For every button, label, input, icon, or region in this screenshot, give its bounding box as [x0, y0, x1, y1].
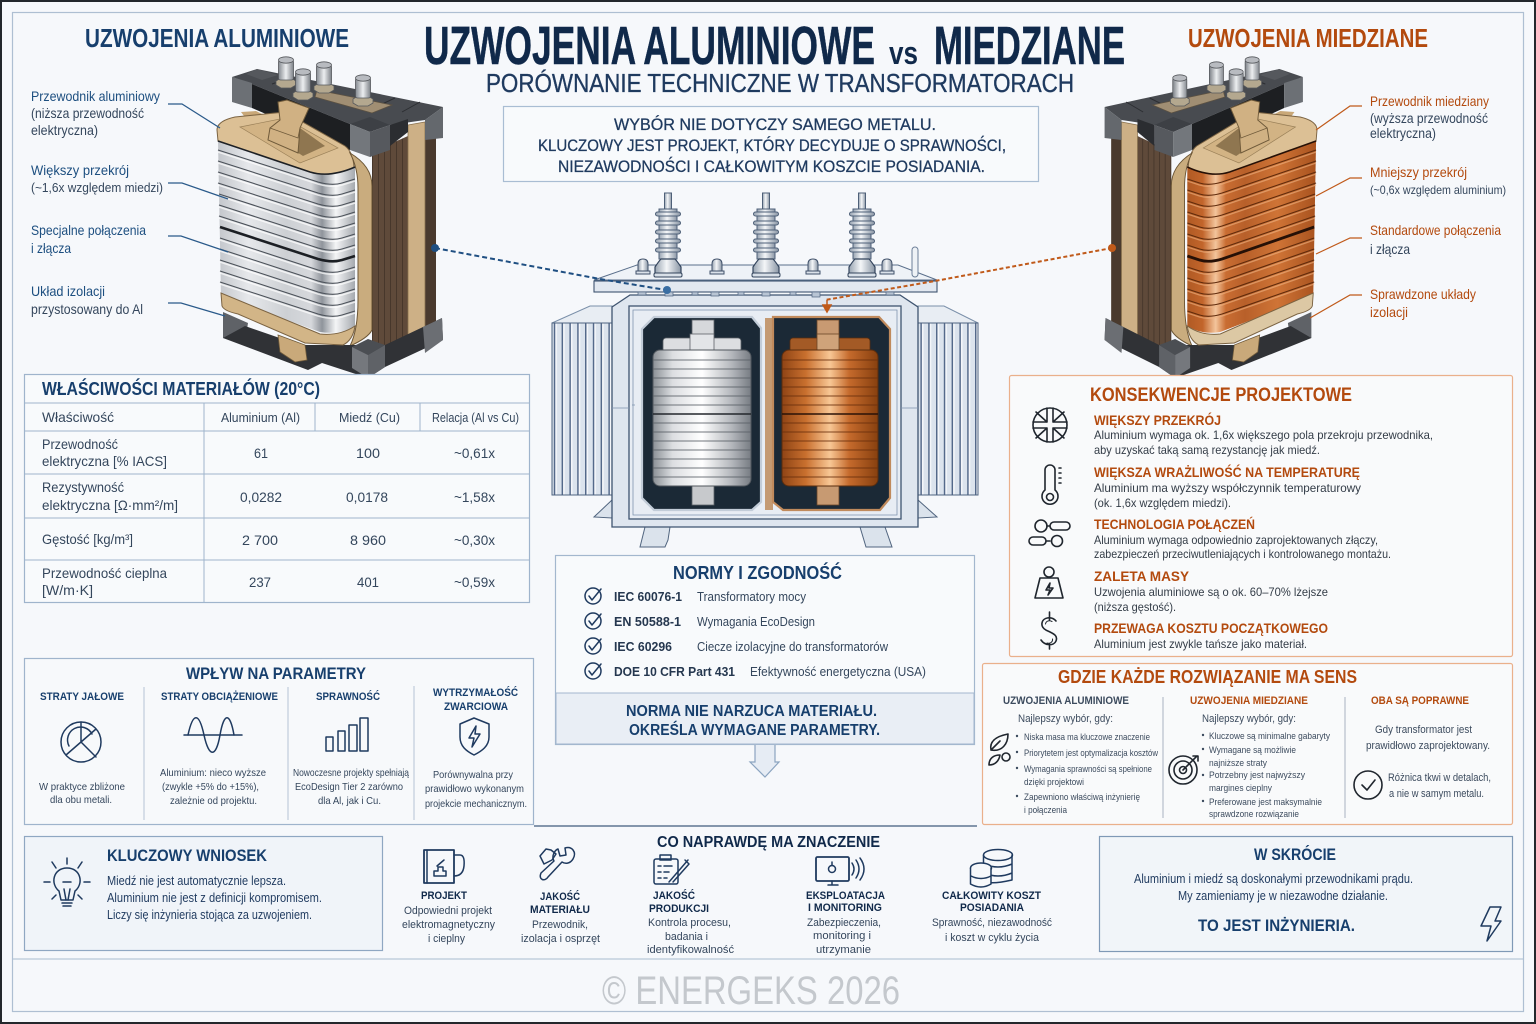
copper callout labels: (wyższa przewodność — [1370, 111, 1488, 126]
table rows: Przewodność — [42, 436, 118, 452]
item: connection technology — [1094, 516, 1391, 561]
table rows: elektryczna [% IACS] — [42, 453, 167, 469]
column: efficiency — [293, 690, 409, 807]
feet — [594, 500, 937, 547]
standards list: Efektywność energetyczna (USA) — [750, 664, 926, 679]
column: copper windings: Potrzebny jest najwyższy — [1209, 770, 1305, 781]
callout: key statement: NIEZAWODNOŚCI I CAŁKOWITYM KOSZCIE POSIADANIA. — [558, 157, 985, 176]
title: UZWOJENIA ALUMINIOWE — [424, 16, 875, 76]
table rows — [42, 436, 495, 598]
heading: copper: UZWOJENIA MIEDZIANE — [1188, 23, 1428, 53]
column: load losses — [160, 690, 278, 807]
item: initial cost advantage — [1094, 620, 1328, 651]
column: aluminium windings: i połączenia — [1024, 805, 1068, 816]
icon: weight — [1035, 567, 1063, 598]
table header: Aluminium (Al) — [221, 410, 300, 425]
item: material quality: Przewodnik, — [532, 919, 588, 931]
copper callout labels: Mniejszy przekrój — [1370, 164, 1467, 180]
column: copper windings: najniższe straty — [1209, 758, 1267, 769]
panel: in short — [1100, 836, 1512, 952]
item: production quality — [647, 855, 734, 956]
column: load losses: (zwykle +5% do +15%), — [162, 781, 259, 793]
bushings — [636, 193, 894, 277]
panel: key takeaway: KLUCZOWY WNIOSEK — [107, 846, 268, 865]
column: copper windings: UZWOJENIA MIEDZIANE — [1190, 695, 1308, 707]
item: larger cross-section: WIĘKSZY PRZEKRÓJ — [1094, 411, 1221, 428]
table title: WŁAŚCIWOŚCI MATERIAŁÓW (20°C) — [42, 378, 320, 399]
column: short-circuit strength: WYTRZYMAŁOŚĆ — [433, 686, 518, 699]
arrow: copper link dashed — [823, 244, 1116, 312]
copper callout labels: Sprawdzone układy — [1370, 286, 1476, 302]
item: production quality: PRODUKCJI — [649, 903, 709, 915]
copper callout labels: (~0,6x względem aluminium) — [1370, 183, 1506, 197]
panel: in short: My zamieniamy je w niezawodne działanie. — [1178, 889, 1388, 903]
column: copper windings: Najlepszy wybór, gdy: — [1202, 713, 1296, 725]
copper callout labels — [1310, 93, 1506, 320]
table rows: 100 — [356, 445, 380, 461]
column: aluminium windings — [989, 695, 1158, 816]
item: temperature sensitivity: (ok. 1,6x względem miedzi). — [1094, 496, 1231, 510]
table rows: ~0,59x — [454, 574, 495, 590]
icon: cross-section — [1033, 408, 1067, 442]
column: both correct — [1354, 695, 1491, 800]
column: no-load losses: dla obu metali. — [50, 794, 112, 806]
table header — [42, 409, 519, 425]
item: material quality: MATERIAŁU — [530, 904, 590, 916]
column: aluminium windings: Niska masa ma kluczowe znaczenie — [1024, 732, 1150, 743]
copper callout labels: Przewodnik miedziany — [1370, 93, 1489, 109]
tank inner lines — [612, 310, 918, 515]
aluminium callout labels: Specjalne połączenia — [31, 222, 146, 238]
column: short-circuit strength: ZWARCIOWA — [444, 701, 508, 713]
item: design: i cieplny — [428, 933, 465, 945]
item: production quality: Kontrola procesu, — [648, 917, 731, 929]
item: material quality: JAKOŚĆ — [540, 890, 580, 903]
table rows: Gęstość [kg/m³] — [42, 531, 133, 547]
column: load losses: STRATY OBCIĄŻENIOWE — [161, 690, 278, 703]
panel: key takeaway — [24, 836, 382, 950]
title: vs — [889, 35, 918, 71]
column: copper windings: margines cieplny — [1209, 783, 1272, 794]
table rows: [W/m·K] — [42, 582, 93, 598]
panel: key takeaway: Aluminium nie jest z definicji kompromisem. — [107, 891, 322, 905]
column: copper windings — [1169, 695, 1330, 820]
copper callout labels: izolacji — [1370, 304, 1408, 320]
arrow: aluminium link dashed — [431, 244, 671, 294]
callout: key statement: WYBÓR NIE DOTYCZY SAMEGO METALU. — [614, 115, 936, 134]
aluminium callout labels: (~1,6x względem miedzi) — [31, 180, 163, 195]
standards list: EN 50588-1 — [614, 614, 681, 629]
item: operation and monitoring: Zabezpieczenia, — [807, 917, 881, 929]
title: MIEDZIANE — [934, 16, 1125, 76]
item: design: elektromagnetyczny — [402, 919, 495, 931]
table header: Miedź (Cu) — [339, 410, 400, 425]
aluminium callout labels: Przewodnik aluminiowy — [31, 88, 160, 104]
panel: impact on parameters — [24, 658, 534, 824]
column: both correct: a nie w samym metalu. — [1389, 788, 1484, 800]
footer copyright: © ENERGEKS 2026 — [602, 969, 900, 1013]
footer divider — [13, 958, 1523, 960]
item: operation and monitoring — [806, 857, 885, 956]
aluminium callout labels: Układ izolacji — [31, 283, 105, 299]
item: weight advantage — [1094, 568, 1328, 614]
table rows: elektryczna [Ω·mm²/m] — [42, 497, 178, 513]
standards conclusion: NORMA NIE NARZUCA MATERIAŁU. — [626, 703, 877, 720]
copper callout labels: Standardowe połączenia — [1370, 222, 1501, 238]
right radiator — [918, 306, 978, 495]
standards title: NORMY I ZGODNOŚĆ — [673, 562, 842, 583]
heading: aluminium: UZWOJENIA ALUMINIOWE — [85, 23, 349, 53]
table rows: 0,0282 — [240, 489, 282, 505]
aluminium chamber — [642, 317, 761, 510]
item: material quality: izolacja i osprzęt — [521, 933, 600, 945]
column: copper windings: Wymagane są możliwie — [1209, 745, 1296, 756]
aluminium callout labels: elektryczna) — [31, 122, 98, 138]
column: copper windings: Kluczowe są minimalne gabaryty — [1209, 731, 1330, 742]
table rows: 237 — [249, 574, 271, 590]
column: efficiency: dla Al, jak i Cu. — [318, 795, 381, 807]
table rows: ~1,58x — [454, 489, 495, 505]
panel title: KONSEKWENCJE PROJEKTOWE — [1090, 385, 1352, 406]
column: both correct: Różnica tkwi w detalach, — [1388, 772, 1491, 784]
item: production quality: JAKOŚĆ — [653, 889, 695, 902]
table rows: 61 — [254, 445, 268, 461]
icon: dollar — [1041, 612, 1057, 649]
item: material quality — [521, 848, 600, 945]
column: short-circuit strength — [425, 686, 527, 810]
item: total cost of ownership: Sprawność, niezawodność — [932, 917, 1052, 929]
tan column between chambers — [765, 318, 773, 510]
panel: design consequences — [1010, 376, 1512, 656]
icon: connection chain — [1029, 520, 1070, 546]
panel: key takeaway: Miedź nie jest automatycznie lepsza. — [107, 874, 286, 888]
copper callout labels: elektryczna) — [1370, 126, 1436, 141]
item: design: Odpowiedni projekt — [404, 905, 492, 917]
column: both correct: Gdy transformator jest — [1375, 724, 1472, 736]
callout: key statement: KLUCZOWY JEST PROJEKT, KTÓRY DECYDUJE O SPRAWNOŚCI, — [538, 136, 1006, 155]
copper coil illustration — [1105, 57, 1317, 378]
standards list: IEC 60296 — [614, 639, 672, 654]
table rows: Rezystywność — [42, 479, 124, 495]
panel: in short: TO JEST INŻYNIERIA. — [1198, 916, 1355, 935]
column: efficiency: Nowoczesne projekty spełniają — [293, 767, 409, 779]
column: aluminium windings: dzięki projektowi — [1024, 777, 1084, 788]
copper chamber — [773, 317, 890, 510]
oil gauge — [912, 247, 918, 277]
column: no-load losses — [39, 691, 125, 806]
item: larger cross-section — [1094, 411, 1433, 457]
item: total cost of ownership: POSIADANIA — [960, 902, 1024, 914]
column: load losses: Aluminium: nieco wyższe — [160, 767, 266, 779]
icon: light bulb — [44, 858, 90, 906]
column: efficiency: EcoDesign Tier 2 zarówno — [295, 781, 403, 793]
table grid — [24, 403, 530, 603]
item: total cost of ownership: CAŁKOWITY KOSZT — [942, 890, 1041, 902]
item: temperature sensitivity: Aluminium ma wyższy współczynnik temperaturowy — [1094, 481, 1361, 495]
divider above what matters — [534, 825, 977, 827]
arrow: down from standards — [750, 745, 779, 777]
central transformer illustration — [552, 193, 978, 547]
icon: thermometer — [1042, 465, 1061, 504]
item: initial cost advantage: Aluminium jest zwykle tańsze jako materiał. — [1094, 637, 1307, 651]
standards conclusion — [626, 703, 880, 739]
column: load losses: zależnie od projektu. — [170, 795, 257, 807]
item: operation and monitoring: monitoring i — [813, 930, 871, 942]
aluminium callout labels — [31, 88, 228, 317]
table rows: Przewodność cieplna — [42, 565, 167, 581]
item: initial cost advantage: PRZEWAGA KOSZTU POCZĄTKOWEGO — [1094, 620, 1328, 636]
aluminium coil illustration — [217, 57, 443, 378]
table rows: ~0,30x — [454, 532, 495, 548]
item: operation and monitoring: EKSPLOATACJA — [806, 890, 885, 902]
item: design — [402, 850, 495, 945]
column: short-circuit strength: prawidłowo wykonanym — [425, 783, 524, 795]
item: weight advantage: (niższa gęstość). — [1094, 600, 1176, 614]
column: short-circuit strength: projekcie mechanicznym. — [425, 798, 527, 810]
column: no-load losses: W praktyce zbliżone — [39, 781, 125, 793]
item: larger cross-section: aby uzyskać taką samą rezystancję jak miedź. — [1094, 443, 1320, 457]
aluminium winding — [653, 320, 751, 505]
left radiator — [552, 306, 612, 495]
tank cover — [594, 265, 937, 297]
panel: in short: Aluminium i miedź są doskonałymi przewodnikami prądu. — [1134, 872, 1413, 886]
item: larger cross-section: Aluminium wymaga ok. 1,6x większego pola przekroju przewodnika, — [1094, 428, 1433, 442]
item: connection technology: TECHNOLOGIA POŁĄCZEŃ — [1094, 516, 1255, 532]
tank inner frame — [629, 306, 901, 519]
column: both correct: prawidłowo zaprojektowany. — [1366, 740, 1490, 752]
item: operation and monitoring: I MONITORING — [808, 902, 882, 914]
item: weight advantage: ZALETA MASY — [1094, 568, 1190, 584]
item: production quality: badania i — [665, 931, 708, 943]
table rows: 8 960 — [350, 532, 386, 548]
item: temperature sensitivity — [1094, 463, 1361, 510]
column: aluminium windings: UZWOJENIA ALUMINIOWE — [1003, 695, 1129, 707]
column: both correct: OBA SĄ POPRAWNE — [1371, 695, 1469, 707]
item: weight advantage: Uzwojenia aluminiowe są o ok. 60–70% lżejsze — [1094, 585, 1328, 599]
column: short-circuit strength: Porównywalna przy — [433, 769, 514, 781]
copper callout labels: i złącza — [1370, 241, 1410, 257]
table rows: 401 — [357, 574, 379, 590]
column: efficiency: SPRAWNOŚĆ — [316, 690, 380, 703]
standards conclusion: OKREŚLA WYMAGANE PARAMETRY. — [629, 720, 880, 739]
column: copper windings: sprawdzone rozwiązanie — [1209, 809, 1299, 820]
aluminium callout labels: przystosowany do Al — [31, 301, 143, 317]
item: design: PROJEKT — [421, 890, 467, 902]
standards list: Wymagania EcoDesign — [697, 614, 815, 629]
panel: where each solution makes sense — [982, 664, 1512, 824]
section: what really matters — [402, 834, 1052, 956]
standards list: DOE 10 CFR Part 431 — [614, 664, 735, 679]
panel title: GDZIE KAŻDE ROZWIĄZANIE MA SENS — [1058, 667, 1357, 687]
column: no-load losses: STRATY JAŁOWE — [40, 691, 124, 703]
panel: material properties table — [24, 374, 530, 603]
table rows: ~0,61x — [454, 445, 495, 461]
table rows: 0,0178 — [346, 489, 388, 505]
item: total cost of ownership — [932, 850, 1052, 944]
column: aluminium windings: Najlepszy wybór, gdy: — [1018, 713, 1113, 725]
column: copper windings: Preferowane jest maksymalnie — [1209, 797, 1322, 808]
icon: lightning bolt — [1481, 907, 1501, 941]
aluminium callout labels: (niższa przewodność — [31, 105, 144, 121]
column: aluminium windings: Priorytetem jest optymalizacja kosztów — [1024, 748, 1158, 759]
item: operation and monitoring: utrzymanie — [816, 944, 871, 956]
subtitle: PORÓWNANIE TECHNICZNE W TRANSFORMATORACH — [486, 68, 1074, 98]
section: what really matters: CO NAPRAWDĘ MA ZNACZENIE — [657, 834, 880, 851]
panel title: WPŁYW NA PARAMETRY — [186, 664, 367, 683]
item: temperature sensitivity: WIĘKSZA WRAŻLIWOŚĆ NA TEMPERATURĘ — [1094, 463, 1360, 480]
column: aluminium windings: Zapewniono właściwą inżynierię — [1024, 792, 1140, 803]
standards list: Transformatory mocy — [697, 589, 806, 604]
aluminium callout labels: Większy przekrój — [31, 162, 129, 178]
item: total cost of ownership: i koszt w cyklu życia — [945, 932, 1040, 944]
standards list: IEC 60076-1 — [614, 589, 682, 604]
table header: Właściwość — [42, 409, 114, 425]
copper winding — [782, 320, 878, 505]
table header: Relacja (Al vs Cu) — [432, 411, 519, 425]
panel: key takeaway: Liczy się inżynieria stojąca za uzwojeniem. — [107, 908, 312, 922]
standards list: Ciecze izolacyjne do transformatorów — [697, 639, 889, 654]
item: connection technology: zabezpieczeń przeciwutleniających i kontrolowanego montażu. — [1094, 547, 1391, 561]
callout: key statement — [504, 106, 1038, 182]
tank body — [612, 295, 918, 527]
aluminium callout labels: i złącza — [31, 240, 71, 256]
column: aluminium windings: Wymagania sprawności są spełnione — [1024, 764, 1152, 775]
item: production quality: identyfikowalność — [647, 944, 734, 956]
panel: in short: W SKRÓCIE — [1254, 845, 1336, 864]
item: connection technology: Aluminium wymaga odpowiednio zaprojektowanych złączy, — [1094, 533, 1378, 547]
table rows: 2 700 — [242, 532, 278, 548]
standards list — [585, 588, 926, 679]
panel: standards and compliance — [556, 556, 974, 744]
